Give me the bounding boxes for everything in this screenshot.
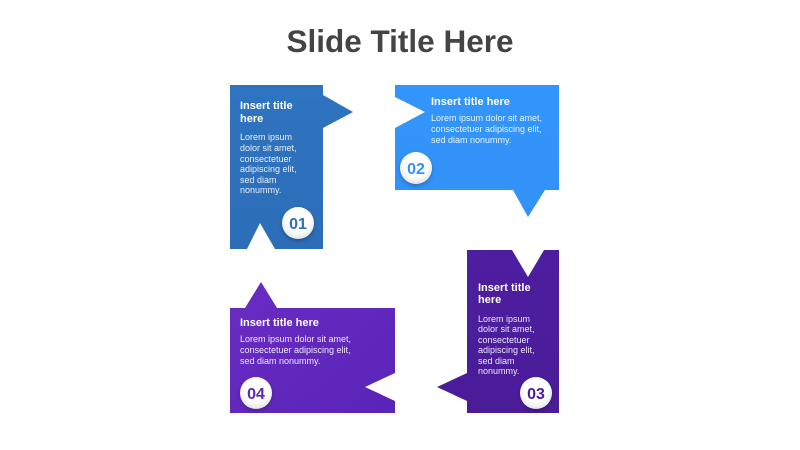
title: Slide Title Here (286, 23, 514, 59)
panel 3: sed diam (478, 356, 515, 366)
badge 02 (400, 152, 432, 184)
panel 2 (395, 85, 559, 217)
panel 2: sed diam nonummy. (431, 135, 511, 145)
panel 4: consectetuer adipiscing elit, (240, 345, 351, 355)
panel 1 (230, 85, 353, 249)
panel 1: Insert title (240, 100, 293, 112)
badge 04 (240, 377, 272, 409)
panel 1: Lorem ipsum (240, 132, 292, 142)
panel 4 (230, 282, 395, 413)
panel 1: dolor sit amet, (240, 143, 297, 153)
panel 1: sed diam (240, 175, 277, 185)
panel 1: adipiscing elit, (240, 164, 297, 174)
panel 2: Lorem ipsum dolor sit amet, (431, 113, 542, 123)
badge 01 (282, 207, 314, 239)
badge 02: 02 (407, 161, 425, 178)
panel 2: Insert title here (431, 96, 510, 108)
badge 04: 04 (247, 386, 265, 403)
panel 1: here (240, 113, 263, 125)
panel 3: dolor sit amet, (478, 324, 535, 334)
panel 3: nonummy. (478, 366, 519, 376)
panel 3: Lorem ipsum (478, 314, 530, 324)
panel 3: here (478, 294, 501, 306)
panel 3: consectetuer (478, 335, 530, 345)
panel 4: sed diam nonummy. (240, 356, 320, 366)
panel 1: nonummy. (240, 185, 281, 195)
badge 01: 01 (289, 216, 307, 233)
badge 03: 03 (527, 386, 545, 403)
badge 03 (520, 377, 552, 409)
panel 4: Insert title here (240, 317, 319, 329)
panel 1: consectetuer (240, 154, 292, 164)
panel 3 (437, 250, 559, 413)
panel 2: consectetuer adipiscing elit, (431, 124, 542, 134)
panel 3: Insert title (478, 282, 531, 294)
panel 3: adipiscing elit, (478, 345, 535, 355)
panel 4: Lorem ipsum dolor sit amet, (240, 334, 351, 344)
